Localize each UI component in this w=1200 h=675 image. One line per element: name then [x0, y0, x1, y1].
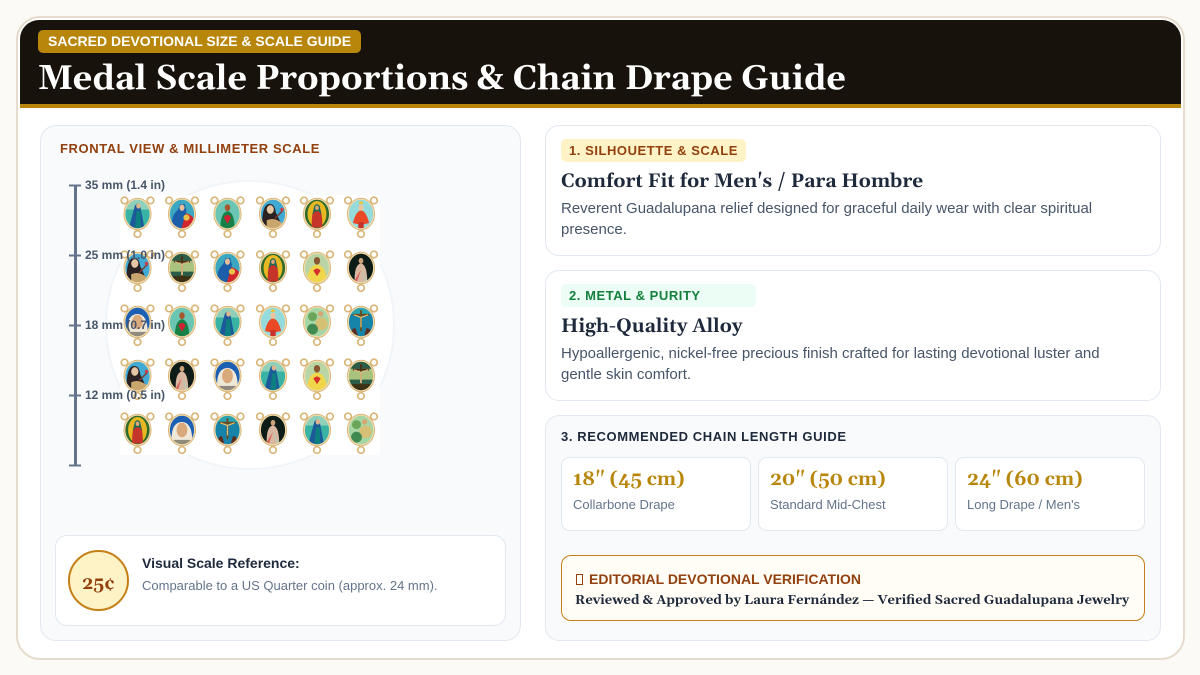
medal backdrop circle [105, 180, 395, 470]
chain option 18 inch: Collarbone Drape [573, 497, 675, 512]
header tag: SACRED DEVOTIONAL SIZE & SCALE GUIDE [48, 33, 351, 49]
chain option 24 inch: Long Drape / Men's [967, 497, 1080, 512]
verification text: Reviewed & Approved by Laura Fernández — Verified Sacred Guadalupana Jewelry [575, 593, 1129, 609]
chain option 20 inch: 20" (50 cm) [770, 468, 886, 492]
title: Medal Scale Proportions & Chain Drape Guide [38, 57, 846, 101]
chain option 18 inch: 18" (45 cm) [573, 468, 685, 492]
metal badge [561, 284, 756, 307]
coin scale reference card [55, 535, 506, 626]
coin reference heading: Visual Scale Reference: [142, 555, 300, 571]
panel: silhouette and scale [545, 125, 1161, 256]
verification heading: EDITORIAL DEVOTIONAL VERIFICATION [589, 571, 861, 587]
chain guide heading: 3. RECOMMENDED CHAIN LENGTH GUIDE [561, 429, 847, 444]
panel: frontal view and scale [40, 125, 521, 641]
metal badge: 2. METAL & PURITY [569, 288, 701, 303]
callout: editorial verification [561, 555, 1145, 621]
silhouette description: Reverent Guadalupana relief designed for graceful daily wear with clear spiritual presence. [561, 200, 1092, 238]
chain option 18 inch [561, 457, 751, 531]
metal heading: High-Quality Alloy [561, 315, 742, 339]
ruler labels: 35 mm (1.4 in) [85, 178, 165, 192]
millimeter ruler [69, 184, 81, 466]
panel: chain length guide [545, 415, 1161, 641]
silhouette heading: Comfort Fit for Men's / Para Hombre [561, 170, 923, 194]
chain option 20 inch: Standard Mid-Chest [770, 497, 886, 512]
metal description: Hypoallergenic, nickel-free precious finish crafted for lasting devotional luster and gentle skin comfort. [561, 345, 1100, 383]
chain option 20 inch [758, 457, 948, 531]
panel: metal and purity [545, 270, 1161, 401]
panel heading: frontal view: FRONTAL VIEW & MILLIMETER SCALE [60, 141, 320, 156]
header tag [38, 30, 361, 53]
ruler labels: 12 mm (0.5 in) [85, 388, 165, 402]
silhouette badge: 1. SILHOUETTE & SCALE [569, 143, 738, 158]
silhouette badge [561, 139, 746, 162]
ruler labels: 25 mm (1.0 in) [85, 248, 165, 262]
chain option 24 inch: 24" (60 cm) [967, 468, 1083, 492]
ruler labels: 18 mm (0.7 in) [85, 318, 165, 332]
header band [20, 20, 1181, 108]
coin reference text: Comparable to a US Quarter coin (approx. 24 mm). [142, 578, 438, 593]
icon: quarter coin [68, 550, 129, 611]
chain option 24 inch [955, 457, 1145, 531]
ruler labels [85, 178, 165, 402]
medal grid image [120, 195, 380, 455]
icon: quarter coin: 25¢ [82, 573, 115, 596]
